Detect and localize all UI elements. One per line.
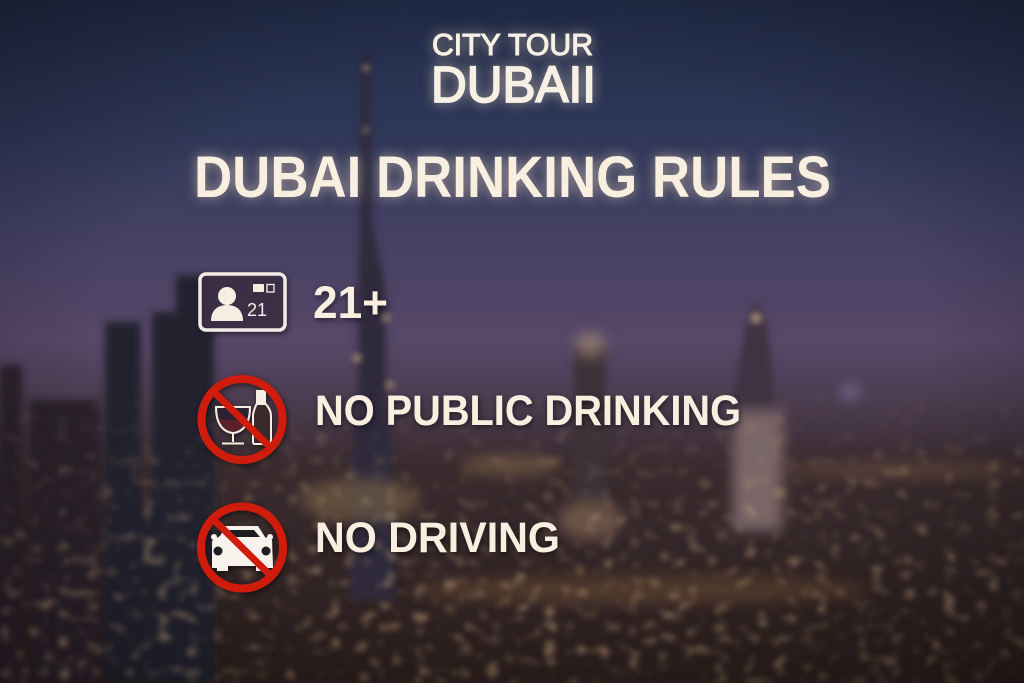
text: no driving: NO DRIVING bbox=[315, 514, 560, 562]
rule row: 21+ bbox=[200, 274, 388, 330]
icon: ID card bbox=[200, 274, 285, 330]
logo: City Tour Dubaii: DUBAII bbox=[431, 56, 596, 113]
icon: no alcohol bbox=[202, 379, 282, 460]
rule row: no public drinking bbox=[202, 379, 741, 460]
lit tower highlights bbox=[300, 333, 1020, 604]
main heading: DUBAI DRINKING RULES bbox=[194, 145, 831, 210]
logo: City Tour Dubaii: CITY TOUR bbox=[432, 27, 593, 62]
icon: no car bbox=[201, 506, 283, 588]
text: 21+: 21+ bbox=[313, 277, 388, 328]
icon: ID card: 21 bbox=[247, 300, 267, 320]
text: no public drinking: NO PUBLIC DRINKING bbox=[315, 387, 741, 435]
city lights bbox=[0, 422, 1024, 683]
skyline towers bbox=[0, 55, 775, 683]
logo: City Tour Dubaii bbox=[431, 27, 596, 113]
rule row: no driving bbox=[201, 506, 560, 588]
tower spire light points bbox=[352, 64, 762, 390]
